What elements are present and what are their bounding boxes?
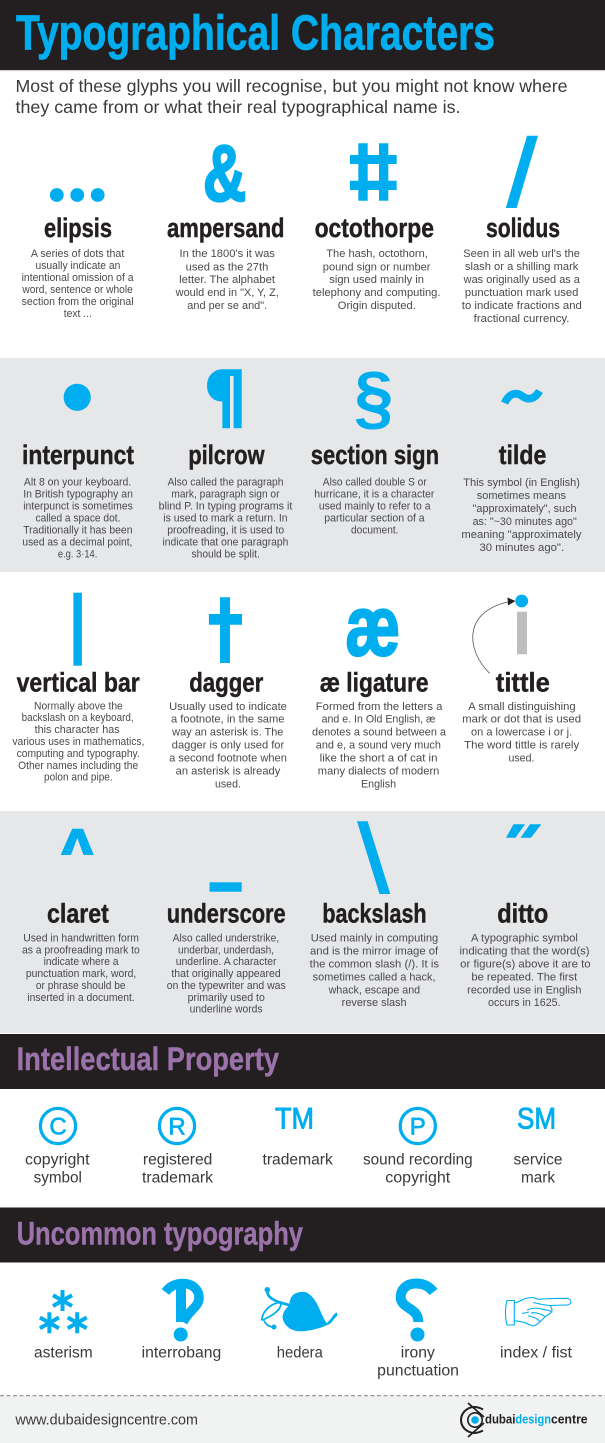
description: interpunct: interpunct is sometimes xyxy=(23,500,133,512)
description: pilcrow: indicate that one paragraph xyxy=(162,536,288,548)
description: tilde: "approximately", such xyxy=(473,503,577,515)
arrow: curve pointing to tittle xyxy=(473,598,515,673)
description: ditto xyxy=(460,933,591,1009)
description: section sign: hurricane, it is a character xyxy=(314,488,435,500)
description: solidus: slash or a shilling mark xyxy=(465,261,579,273)
description: dagger xyxy=(169,701,287,790)
description: ampersand: letter. The alphabet xyxy=(179,274,275,286)
description: dagger: dagger is only used for xyxy=(172,740,285,752)
description: vertical bar: Other names including the xyxy=(18,760,138,772)
description: elipsis: section from the original xyxy=(22,296,134,308)
description: section sign: document. xyxy=(351,524,398,536)
item: interpunct xyxy=(22,384,134,560)
panel: row two xyxy=(0,358,605,572)
description: section sign: particular section of a xyxy=(324,512,425,524)
description: vertical bar: various uses in mathematics, xyxy=(12,736,144,748)
heading: pilcrow: pilcrow xyxy=(188,440,265,470)
heading: tittle: tittle xyxy=(496,668,550,698)
description: interpunct: Traditionally it has been xyxy=(23,524,133,536)
description: tilde: sometimes means xyxy=(477,490,566,502)
label: registered trademark: registered xyxy=(143,1151,212,1168)
description: claret: Used in handwritten form xyxy=(23,932,139,944)
description: tittle: A small distinguishing xyxy=(468,701,576,713)
description: underscore: Also called understrike, xyxy=(173,932,279,944)
description: underscore: underline words xyxy=(190,1004,263,1016)
label: irony punctuation: irony xyxy=(401,1345,435,1362)
description: solidus: was originally used as a xyxy=(463,274,580,286)
description: elipsis xyxy=(21,248,134,320)
label: registered trademark: trademark xyxy=(142,1169,213,1186)
description: tilde: This symbol (in English) xyxy=(463,477,580,489)
item: solidus xyxy=(462,136,582,325)
label: index / fist: index / fist xyxy=(500,1345,573,1362)
description: dagger: way an asterisk is. The xyxy=(171,727,284,739)
description: interpunct: called a space dot. xyxy=(36,512,120,524)
description: octothorpe: Origin disputed. xyxy=(338,300,416,312)
icon: backslash xyxy=(357,821,390,894)
description: ditto: indicating that the word(s) xyxy=(460,945,590,957)
heading: claret: claret xyxy=(47,899,109,929)
description: solidus: fractional currency. xyxy=(474,313,570,325)
item: pilcrow xyxy=(159,369,292,560)
description: claret: or phrase should be xyxy=(36,980,126,992)
item: ditto xyxy=(460,824,591,1009)
description: underscore: underbar, underdash, xyxy=(178,944,274,956)
heading: underscore: underscore xyxy=(167,899,286,929)
item: service mark xyxy=(514,1102,562,1186)
icon: interrobang xyxy=(166,1284,199,1342)
heading: ampersand: ampersand xyxy=(167,213,284,243)
section band: Intellectual Property xyxy=(0,1034,605,1089)
description: backslash: reverse slash xyxy=(342,997,407,1009)
description: octothorpe xyxy=(313,248,441,312)
item: interrobang xyxy=(142,1284,221,1362)
description: elipsis: word, sentence or whole xyxy=(21,284,133,296)
heading: backslash: backslash xyxy=(322,899,427,929)
description: solidus: Seen in all web url's the xyxy=(463,248,580,260)
description: pilcrow: proofreading, it is used to xyxy=(167,524,284,536)
icon: ditto xyxy=(506,824,541,838)
item: asterism xyxy=(34,1290,93,1362)
description: tilde: 30 minutes ago". xyxy=(480,542,564,554)
description: ae ligature: like the short a of cat in xyxy=(320,753,438,765)
description: ditto: be repeated. The first xyxy=(471,971,577,983)
icon: tilde xyxy=(504,391,540,403)
description: elipsis: usually indicate an xyxy=(36,260,120,272)
description: ampersand: used as the 27th xyxy=(186,261,268,273)
footer xyxy=(0,1396,605,1443)
panel: row four xyxy=(0,811,605,1033)
description: tittle: mark or dot that is used xyxy=(462,714,581,726)
heading: ditto: ditto xyxy=(497,899,548,929)
intro text: they came from or what their real typographical name is. xyxy=(16,97,460,117)
description: underscore: primarily used to xyxy=(188,992,265,1004)
label: sound recording copyright: copyright xyxy=(385,1169,451,1186)
item: copyright xyxy=(25,1108,90,1186)
logo: dubai design centre: design xyxy=(515,1411,551,1426)
description: octothorpe: telephony and computing. xyxy=(313,287,441,299)
description: ampersand: In the 1800's it was xyxy=(180,248,275,260)
label: service mark: mark xyxy=(521,1169,555,1186)
description: interpunct xyxy=(22,477,133,560)
description: underscore xyxy=(167,932,286,1016)
description: vertical bar: computing and typography. xyxy=(17,748,140,760)
label: interrobang: interrobang xyxy=(142,1345,221,1362)
description: elipsis: text ... xyxy=(64,308,92,320)
label: copyright symbol xyxy=(25,1151,90,1186)
description: ampersand: would end in "X, Y, Z, xyxy=(175,287,279,299)
item: trademark xyxy=(262,1102,333,1168)
description: vertical bar: this character has xyxy=(35,724,120,736)
icon: ampersand: & xyxy=(203,128,246,217)
icon: irony punctuation xyxy=(401,1284,434,1342)
description: claret: indicate where a xyxy=(44,956,119,968)
description: ampersand xyxy=(175,248,279,312)
item: index fist xyxy=(500,1298,573,1362)
icon: pilcrow xyxy=(207,369,242,428)
icon: service mark: SM xyxy=(517,1102,556,1135)
description: backslash: Used mainly in computing xyxy=(311,933,438,945)
intro text: Most of these glyphs you will recognise, but you might not know where xyxy=(16,76,568,96)
section band: Intellectual Property: Intellectual Property xyxy=(17,1041,279,1077)
label: irony punctuation: punctuation xyxy=(377,1363,459,1380)
label: copyright symbol: symbol xyxy=(34,1169,82,1186)
icon: vertical bar xyxy=(73,593,82,666)
item: backslash xyxy=(310,821,439,1009)
label: service mark xyxy=(514,1151,562,1186)
intro text xyxy=(16,76,568,117)
description: claret xyxy=(22,932,140,1004)
icon: copyright: C xyxy=(49,1114,67,1140)
section band: Uncommon typography: Uncommon typography xyxy=(17,1215,303,1251)
description: solidus: punctuation mark used xyxy=(465,287,579,299)
item: claret xyxy=(22,829,140,1004)
description: vertical bar: polon and pipe. xyxy=(44,772,113,784)
item: underscore xyxy=(167,882,286,1016)
description: pilcrow: mark, paragraph sign or xyxy=(171,488,280,500)
description: elipsis: A series of dots that xyxy=(31,248,124,260)
icon: hedera xyxy=(262,1287,337,1331)
description: pilcrow xyxy=(159,477,292,560)
description: pilcrow: should be split. xyxy=(192,548,260,560)
section band: Uncommon typography xyxy=(0,1208,605,1262)
heading: dagger: dagger xyxy=(189,668,264,698)
description: interpunct: In British typography an xyxy=(23,488,133,500)
description: octothorpe: sign used mainly in xyxy=(329,274,424,286)
description: underscore: that originally appeared xyxy=(171,968,281,980)
panel: row three xyxy=(12,578,581,790)
description: ae ligature: denotes a sound between a xyxy=(312,727,446,739)
description: dagger: an asterisk is already xyxy=(176,765,281,777)
description: interpunct: Alt 8 on your keyboard. xyxy=(24,477,131,489)
description: ditto: or figure(s) above it are to xyxy=(460,958,591,970)
description: pilcrow: is used to mark a return. In xyxy=(163,512,288,524)
description: claret: inserted in a document. xyxy=(27,992,135,1004)
icon: claret xyxy=(61,829,94,855)
icon: registered: R xyxy=(168,1114,186,1140)
label: sound recording copyright: sound recording xyxy=(363,1151,473,1168)
description: underscore: underline. A character xyxy=(176,956,277,968)
item: ae ligature xyxy=(312,578,446,790)
icon: asterism xyxy=(40,1290,87,1333)
description: backslash: whack, escape and xyxy=(328,984,420,996)
panel: row one xyxy=(21,128,582,325)
description: octothorpe: pound sign or number xyxy=(323,261,431,273)
item: octothorpe xyxy=(313,143,441,312)
description: section sign xyxy=(314,477,435,536)
icon: tittle xyxy=(515,595,528,654)
label: sound recording copyright xyxy=(363,1151,473,1186)
heading: elipsis: elipsis xyxy=(44,213,112,243)
description: ditto: recorded use in English xyxy=(467,984,582,996)
description: tittle: The word tittle is rarely xyxy=(464,740,580,752)
label: asterism: asterism xyxy=(34,1345,93,1362)
description: vertical bar: backslash on a keyboard, xyxy=(22,712,134,724)
description: backslash: and is the mirror image of xyxy=(310,945,438,957)
heading: vertical bar: vertical bar xyxy=(17,668,140,698)
description: backslash: sometimes called a hack, xyxy=(313,971,436,983)
logo: dubai design centre xyxy=(461,1403,588,1437)
description: claret: punctuation mark, word, xyxy=(26,968,136,980)
description: ampersand: and per se and". xyxy=(187,300,267,312)
icon: elipsis dots xyxy=(50,188,105,202)
description: pilcrow: blind P. In typing programs it xyxy=(159,500,292,512)
label: registered trademark xyxy=(142,1151,213,1186)
description: backslash xyxy=(310,933,439,1009)
item: section sign xyxy=(311,358,439,536)
item: elipsis xyxy=(21,188,134,320)
description: ae ligature: and e. In Old English, æ xyxy=(322,714,436,726)
description: interpunct: e.g. 3·14. xyxy=(58,548,97,560)
icon: interpunct xyxy=(64,384,91,411)
description: solidus: to indicate fractions and xyxy=(462,300,582,312)
description: octothorpe: The hash, octothorn, xyxy=(326,248,428,260)
heading: octothorpe: octothorpe xyxy=(315,213,434,243)
description: elipsis: intentional omission of a xyxy=(22,272,134,284)
heading: ae ligature: æ ligature xyxy=(320,668,429,698)
footer url: www.dubaidesigncentre.com xyxy=(14,1412,198,1428)
logo: dubai design centre: centre xyxy=(551,1411,588,1426)
description: tilde: meaning "approximately xyxy=(461,529,582,541)
description: backslash: the common slash (/). It is xyxy=(310,958,439,970)
description: section sign: used mainly to refer to a xyxy=(319,500,431,512)
description: ditto: occurs in 1625. xyxy=(488,997,561,1009)
icon: trademark: TM xyxy=(275,1102,314,1135)
description: vertical bar: Normally above the xyxy=(34,700,123,712)
item: registered xyxy=(142,1108,213,1186)
panel: intellectual property symbols xyxy=(25,1102,562,1186)
description: tittle xyxy=(462,701,581,765)
description: ae ligature: English xyxy=(361,778,396,790)
item: tittle xyxy=(462,595,581,765)
icon: ae ligature: æ xyxy=(346,578,400,673)
description: claret: as a proofreading mark to xyxy=(22,944,140,956)
item: irony punctuation xyxy=(377,1284,459,1380)
description: ae ligature: and e, a sound very much xyxy=(316,740,441,752)
description: section sign: Also called double S or xyxy=(323,477,427,489)
heading: interpunct: interpunct xyxy=(22,440,134,470)
description: dagger: a second footnote when xyxy=(169,753,287,765)
item: vertical bar xyxy=(12,593,144,784)
description: underscore: on the typewriter and was xyxy=(167,980,286,992)
icon: solidus xyxy=(506,136,538,208)
description: dagger: a footnote, in the same xyxy=(171,714,285,726)
description: ae ligature: many dialects of modern xyxy=(318,765,440,777)
description: ae ligature: Formed from the letters a xyxy=(316,701,443,713)
header band with title: Typographical Characters xyxy=(16,6,495,60)
description: dagger: used. xyxy=(215,778,241,790)
description: tilde: as: "~30 minutes ago" xyxy=(473,516,577,528)
description: tilde xyxy=(461,477,582,554)
icon: section sign: § xyxy=(354,358,394,438)
heading: section sign: section sign xyxy=(311,440,439,470)
description: solidus xyxy=(462,248,582,325)
icon: octothorpe xyxy=(350,143,397,201)
icon: underscore xyxy=(210,882,242,892)
description: interpunct: used as a decimal point, xyxy=(22,536,132,548)
item: tilde xyxy=(461,391,582,554)
icon: sound recording copyright: P xyxy=(410,1114,426,1140)
item: ampersand xyxy=(167,128,284,312)
item: sound recording copyright xyxy=(363,1108,473,1186)
label: hedera: hedera xyxy=(277,1345,323,1362)
description: ditto: A typographic symbol xyxy=(471,933,578,945)
description: pilcrow: Also called the paragraph xyxy=(168,477,283,489)
panel: uncommon typography symbols xyxy=(34,1284,573,1380)
label: trademark: trademark xyxy=(262,1151,333,1168)
description: ae ligature xyxy=(312,701,446,790)
logo: dubai design centre: dubai xyxy=(485,1411,515,1426)
heading: tilde: tilde xyxy=(499,440,546,470)
label: service mark: service xyxy=(514,1151,562,1168)
description: dagger: Usually used to indicate xyxy=(169,701,287,713)
icon: dagger xyxy=(209,597,242,663)
description: tittle: on a lowercase i or j. xyxy=(471,727,572,739)
heading: solidus: solidus xyxy=(486,213,560,243)
label: irony punctuation xyxy=(377,1345,459,1380)
description: vertical bar xyxy=(12,700,144,784)
icon: index fist xyxy=(506,1298,571,1326)
label: copyright symbol: copyright xyxy=(25,1151,90,1168)
item: hedera xyxy=(262,1287,337,1362)
item: dagger xyxy=(169,597,287,790)
description: tittle: used. xyxy=(508,753,534,765)
